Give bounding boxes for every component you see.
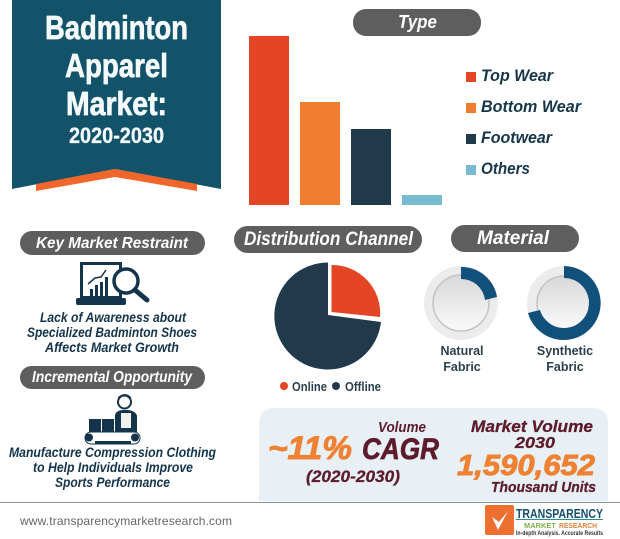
title text: Apparel xyxy=(65,47,168,84)
title text: Badminton xyxy=(45,9,188,46)
title text: Market: xyxy=(66,85,167,122)
logo: In-depth Analysis. Accurate Results xyxy=(516,531,604,537)
legend: type: Others xyxy=(481,159,530,178)
label: natural fabric xyxy=(440,344,484,374)
logo: MARKET xyxy=(524,523,557,530)
CAGR callout: Volume xyxy=(378,419,426,436)
text: opportunity description: Manufacture Compression Clothing xyxy=(9,444,216,460)
label: synthetic fabric: Fabric xyxy=(546,360,584,374)
title banner xyxy=(12,0,221,191)
donut: synthetic fabric xyxy=(527,266,601,340)
pill heading: Type: Type xyxy=(398,12,437,32)
market volume callout: 1,590,652 xyxy=(457,450,595,482)
legend: type xyxy=(466,66,582,178)
label: natural fabric: Natural xyxy=(440,344,484,358)
market volume callout: 2030 xyxy=(514,435,555,452)
pill heading: Type xyxy=(353,9,481,36)
text: opportunity description: to Help Individuals Improve xyxy=(33,459,193,475)
legend: distribution channel: Offline xyxy=(345,380,381,394)
market volume callout: Thousand Units xyxy=(491,479,596,496)
CAGR callout: ~11% xyxy=(268,430,352,466)
pill heading: Key Market Restraint xyxy=(20,231,205,255)
pill heading: Key Market Restraint: Key Market Restraint xyxy=(36,235,189,252)
donut: natural fabric xyxy=(424,266,498,340)
pill heading: Material xyxy=(451,225,579,252)
logo xyxy=(485,505,604,537)
label: natural fabric: Fabric xyxy=(443,360,481,374)
market volume callout: Market Volume xyxy=(471,417,593,436)
website url: www.transparencymarketresearch.com xyxy=(19,514,232,528)
text: restraint description xyxy=(27,309,197,355)
CAGR callout: CAGR xyxy=(362,433,439,466)
pill heading: Incremental Opportunity: Incremental Opportunity xyxy=(32,369,193,386)
icon: worker at conveyor xyxy=(85,394,140,444)
pie chart: distribution channel xyxy=(274,262,381,369)
text: restraint description: Lack of Awareness about xyxy=(40,309,187,325)
legend: type: Footwear xyxy=(481,128,553,147)
text: opportunity description xyxy=(9,444,216,490)
legend: distribution channel xyxy=(280,380,381,394)
legend: distribution channel: Online xyxy=(292,380,327,394)
label: synthetic fabric: Synthetic xyxy=(537,344,593,358)
market volume callout xyxy=(457,417,596,496)
CAGR callout xyxy=(268,419,439,486)
text: restraint description: Affects Market Growth xyxy=(44,339,179,355)
title text: 2020-2030 xyxy=(69,123,164,148)
text: opportunity description: Sports Performance xyxy=(55,474,170,490)
legend: type: Bottom Wear xyxy=(481,97,582,116)
text: restraint description: Specialized Badminton Shoes xyxy=(27,324,197,340)
pill heading: Distribution Channel: Distribution Channel xyxy=(244,229,414,250)
label: synthetic fabric xyxy=(537,344,593,374)
panel: stats xyxy=(259,408,608,501)
legend: type: Top Wear xyxy=(481,66,554,85)
bar chart: type xyxy=(249,36,442,205)
logo: RESEARCH xyxy=(559,523,597,530)
pill heading: Material: Material xyxy=(477,228,550,249)
CAGR callout: (2020-2030) xyxy=(306,467,400,486)
icon: laptop with magnifier xyxy=(76,264,147,305)
title text xyxy=(45,9,188,148)
pill heading: Incremental Opportunity xyxy=(20,366,205,389)
